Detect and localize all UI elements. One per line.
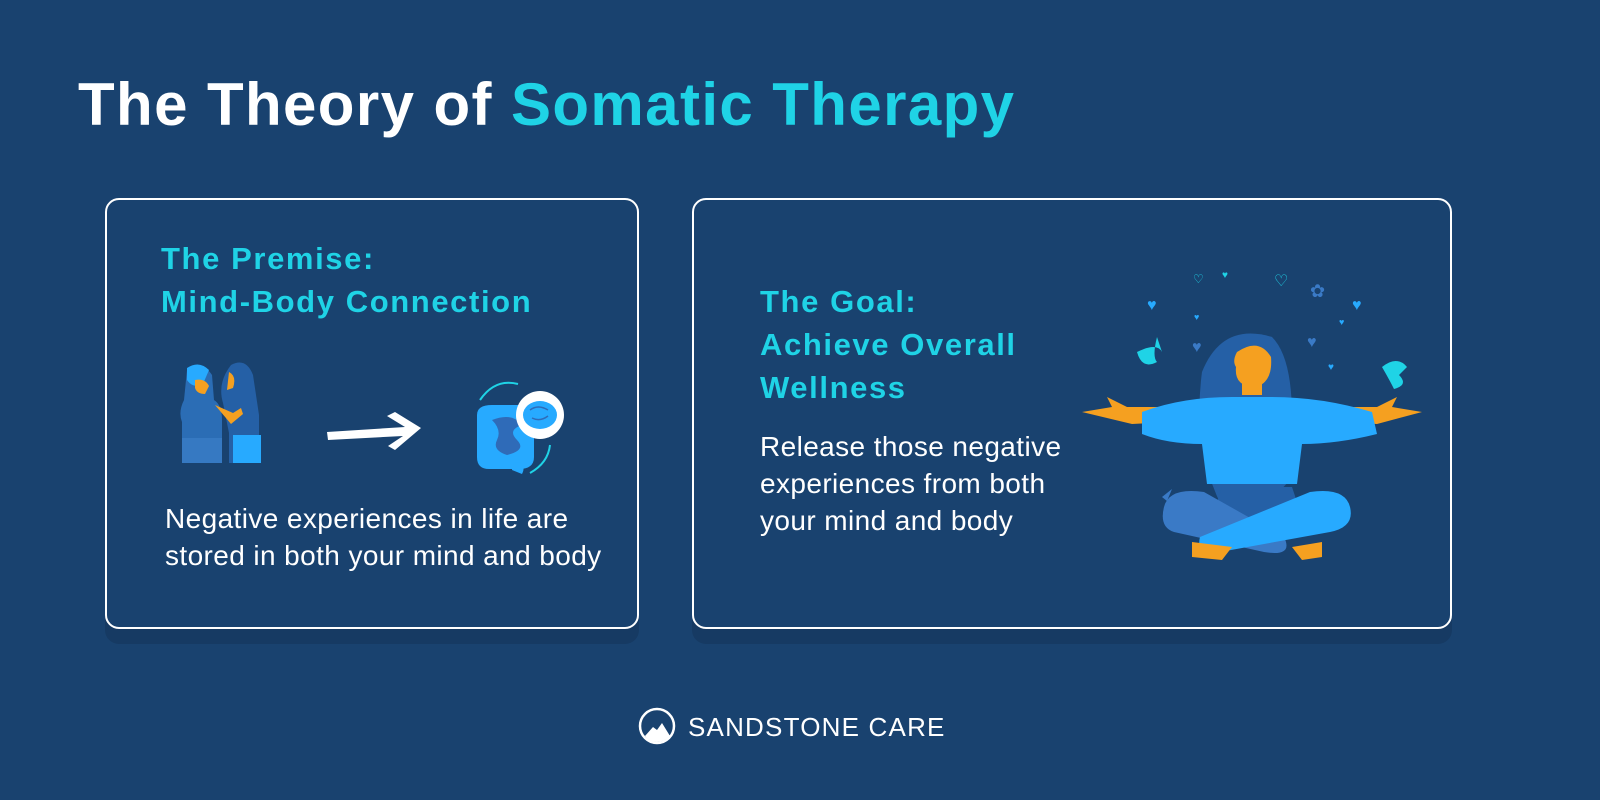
illustration: meditating woman: ♥: [1222, 270, 1228, 281]
heading: goal: The Goal:: [760, 284, 917, 319]
heading: goal: Wellness: [760, 370, 907, 405]
illustration: two women arguing: [180, 362, 261, 463]
text: goal body: Release those negative: [760, 431, 1061, 462]
illustration: meditating woman: ✿: [1310, 281, 1325, 301]
heading: premise: The Premise:: [161, 241, 375, 276]
heading: goal: Achieve Overall: [760, 327, 1017, 362]
panel: goal: [692, 198, 1452, 629]
illustration: meditating woman: ♡: [1274, 273, 1288, 290]
heading: goal: [760, 284, 1017, 405]
icon: mountain circle: [638, 708, 676, 744]
illustration: meditating woman: ♥: [1352, 297, 1362, 314]
illustration: meditating woman: ♥: [1328, 362, 1334, 373]
illustration: meditating woman: ♥: [1194, 312, 1199, 322]
text: premise body: Negative experiences in life are: [165, 503, 568, 534]
heading: premise: Mind-Body Connection: [161, 284, 532, 319]
text: premise body: stored in both your mind and body: [165, 540, 602, 571]
text: premise body: [165, 503, 602, 571]
illustration: meditating woman: ♡: [1193, 272, 1204, 286]
arrow: [327, 412, 421, 450]
text: brand: SANDSTONE CARE: [688, 712, 946, 742]
illustration: meditating woman: ♥: [1339, 317, 1344, 327]
panel: premise: [105, 198, 639, 629]
illustration: meditating woman: ♥: [1307, 334, 1316, 351]
illustration: meditating woman: [1082, 270, 1422, 560]
text: goal body: your mind and body: [760, 505, 1013, 536]
text: goal body: experiences from both: [760, 468, 1045, 499]
illustration: meditating woman: ♥: [1147, 297, 1156, 314]
heading: premise: [161, 241, 532, 319]
illustration: meditating woman: ♥: [1192, 339, 1202, 356]
illustration: gut and brain: [477, 382, 564, 474]
title: The Theory of Somatic Therapy: [78, 71, 1015, 138]
text: goal body: [760, 431, 1061, 536]
logo: [638, 708, 946, 744]
